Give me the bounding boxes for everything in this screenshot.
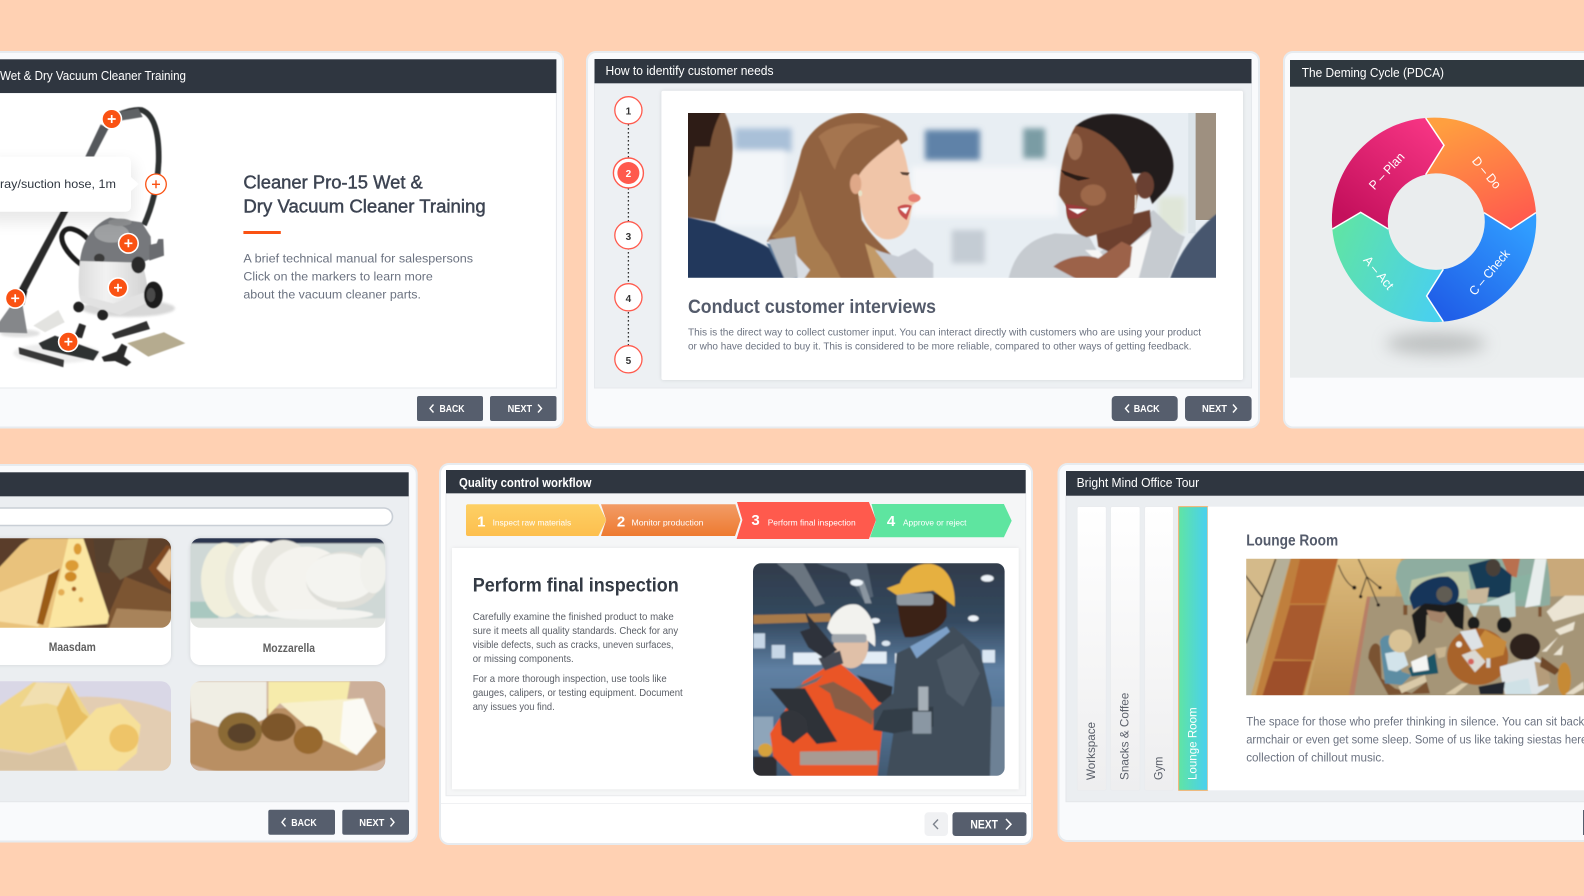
description: A brief technical manual for salespersons [243, 252, 473, 266]
tab: Gym [1145, 507, 1173, 790]
segment: Plan: P – Plan [1366, 150, 1407, 193]
accent rule [243, 231, 281, 234]
tab: Gym: Gym [1152, 757, 1166, 780]
card heading: Perform final inspection [473, 576, 679, 597]
PDCA ring chart [1332, 118, 1536, 322]
tab: Snacks and Coffee: Snacks & Coffee [1118, 692, 1132, 780]
card body: For a more thorough inspection, use tools like [473, 674, 667, 685]
tab: Workspace: Workspace [1084, 722, 1098, 780]
tab: Lounge Room active [1179, 507, 1208, 790]
stepper [613, 97, 643, 373]
segment: Check: C – Check [1466, 246, 1513, 298]
tooltip: hose: ray/suction hose, 1m [0, 177, 116, 191]
button: back: BACK [1134, 403, 1160, 415]
step 3 active [737, 502, 876, 539]
header bar [594, 59, 1252, 83]
photo: cheese chunks [0, 681, 171, 771]
tab: Lounge Room active: Lounge Room [1186, 707, 1200, 780]
marker [107, 277, 129, 298]
step 3 [615, 222, 642, 249]
card: Maasdam [0, 535, 176, 665]
photo: Maasdam [0, 535, 176, 632]
content body [1246, 714, 1584, 764]
card body: or missing components. [473, 654, 574, 665]
header bar: Quality control workflow [459, 476, 592, 490]
step 1 [615, 97, 642, 124]
button: back: BACK [440, 403, 465, 415]
photo: Mozzarella [188, 537, 388, 630]
step 4: Approve or reject [903, 517, 967, 527]
step 2: Monitor production [632, 517, 704, 527]
card: Mozzarella [188, 537, 388, 665]
header bar: The Deming Cycle (PDCA) [1302, 65, 1444, 80]
step 5 [615, 346, 642, 373]
card body: sure it meets all quality standards. Check for any [473, 626, 679, 637]
button: back [268, 810, 335, 835]
segment: Act [1332, 212, 1443, 322]
segment: Act: A – Act [1360, 253, 1397, 293]
step 3 active: 3 [751, 512, 760, 529]
content area [1208, 507, 1584, 790]
step 1: Inspect raw materials [493, 517, 571, 527]
search bar [0, 508, 392, 526]
button: back [417, 396, 483, 421]
step 4 [870, 504, 1012, 537]
vacuum cleaner illustration [0, 108, 185, 367]
header bar [446, 470, 1026, 493]
ring shadow [1386, 332, 1486, 354]
segment: Do: D – Do [1469, 154, 1504, 192]
header bar: Wet & Dry Vacuum Cleaner Training [0, 69, 186, 83]
card heading: Conduct customer interviews [688, 297, 936, 318]
header bar [1066, 471, 1584, 496]
card body [473, 612, 683, 713]
label: Maasdam [49, 642, 96, 654]
segment: Plan [1332, 118, 1444, 229]
button: next: NEXT [359, 817, 385, 829]
heading: Cleaner Pro-15 Wet & [243, 171, 423, 192]
card body: Carefully examine the finished product to make [473, 612, 674, 623]
card body: any issues you find. [473, 702, 555, 713]
tooltip: hose [0, 157, 139, 222]
marker [58, 331, 79, 352]
button: next: NEXT [508, 403, 533, 415]
step 2: 2 [617, 514, 625, 530]
step 1: 1 [626, 106, 632, 118]
button: back: BACK [291, 817, 317, 829]
step 2 active: 2 [626, 169, 632, 180]
tab: Workspace [1077, 507, 1106, 790]
panel: Deming cycle [1284, 52, 1584, 428]
heading [243, 171, 486, 216]
button: back [1112, 396, 1178, 421]
panel: customer needs [587, 52, 1259, 428]
description: Click on the markers to learn more [243, 270, 433, 284]
photo: factory workers [750, 560, 1010, 780]
step 5: 5 [626, 356, 632, 367]
heading: Dry Vacuum Cleaner Training [243, 195, 486, 216]
button: next [490, 396, 556, 421]
button: next [1185, 396, 1252, 421]
step 3 active: Perform final inspection [768, 517, 856, 527]
marker: active [146, 174, 166, 195]
header bar: Bright Mind Office Tour [1077, 476, 1199, 490]
segment: Check [1427, 213, 1536, 322]
step 2 active [613, 158, 643, 188]
label: Mozzarella [263, 643, 316, 655]
segment: Do [1426, 118, 1536, 229]
marker [5, 288, 26, 309]
button: next [952, 812, 1026, 836]
button: back (cropped) [1583, 810, 1584, 835]
step 4: 4 [626, 294, 632, 305]
content heading: Lounge Room [1246, 532, 1338, 549]
button: next: NEXT [970, 820, 998, 832]
header bar [1290, 60, 1584, 87]
marker [101, 108, 122, 130]
card body: visible defects, such as cracks, uneven surfaces, [473, 640, 674, 651]
card body: This is the direct way to collect customer input. You can interact directly with customers who are using your product [688, 328, 1201, 338]
button: previous [924, 812, 948, 836]
panel: cheese catalog [0, 465, 417, 842]
button: next [342, 810, 409, 835]
step 3: 3 [626, 232, 632, 243]
content card [661, 91, 1243, 380]
card body: or who have decided to buy it. This is considered to be more reliable, compared to other ways of getting feedback. [688, 342, 1192, 352]
photo: customer interview [685, 110, 1222, 283]
content card [452, 548, 1019, 789]
step 2 [601, 504, 740, 536]
panel: vacuum cleaner training [0, 52, 563, 428]
photo: brie and figs [190, 681, 386, 771]
header bar [0, 472, 409, 496]
description: about the vacuum cleaner parts. [243, 288, 421, 302]
header bar [0, 59, 556, 93]
step 1 [466, 504, 606, 536]
panel: office tour [1058, 464, 1584, 841]
step chevrons [466, 502, 1012, 539]
card body [688, 328, 1201, 352]
card body: gauges, calipers, or testing equipment. Document [473, 688, 683, 699]
step 1: 1 [477, 514, 485, 530]
marker [118, 233, 139, 254]
step 4 [615, 284, 642, 311]
tab: Snacks and Coffee [1111, 507, 1140, 790]
description [243, 252, 473, 302]
photo: lounge room [1245, 555, 1584, 698]
header bar: How to identify customer needs [606, 64, 774, 78]
step 4: 4 [887, 513, 896, 530]
button: next: NEXT [1202, 403, 1228, 415]
panel: quality control workflow [440, 464, 1032, 844]
content body: collection of chillout music. [1246, 750, 1384, 764]
